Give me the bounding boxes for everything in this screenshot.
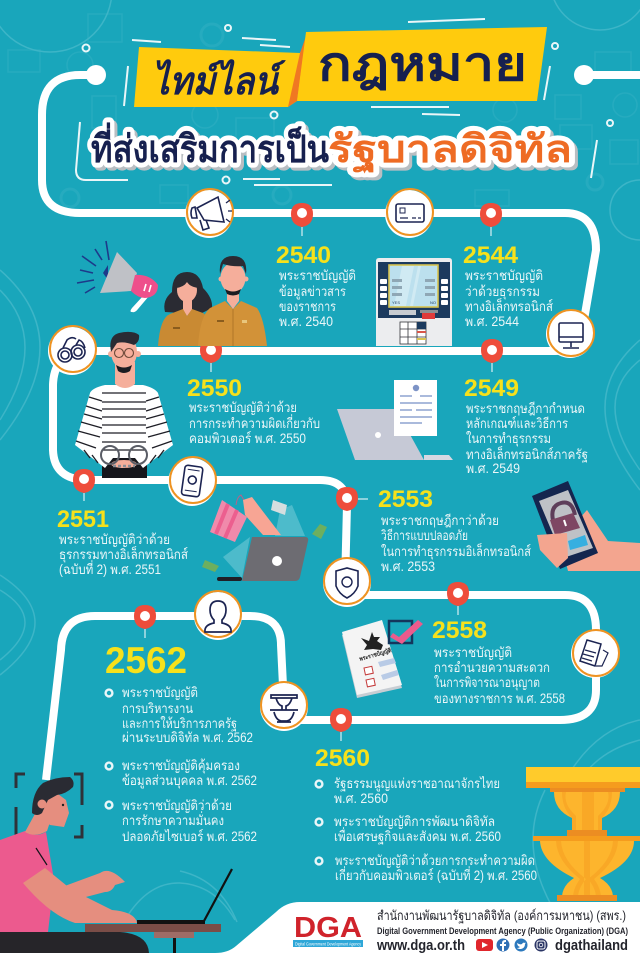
year 2560 block: รัฐธรรมนูญแห่งราชอาณาจักรไทย bbox=[334, 776, 500, 792]
icon: megaphone badge bbox=[185, 189, 233, 238]
year 2544 block bbox=[463, 242, 553, 329]
year 2562 block: และการให้บริการภาครัฐ bbox=[122, 715, 237, 732]
illustration: laptop and document bbox=[337, 380, 453, 460]
year 2553 block: พระราชกฤษฎีกาว่าด้วย bbox=[381, 513, 499, 528]
illustration: megaphone bbox=[77, 241, 158, 312]
illustration: royal decree document bbox=[342, 620, 423, 698]
year 2549 block: พระราชกฤษฎีกากำหนด bbox=[466, 401, 585, 416]
pin 2551 bbox=[73, 469, 95, 501]
year 2540 block: 2540 bbox=[276, 242, 331, 269]
year 2544 block: 2544 bbox=[463, 242, 519, 269]
icon: monitor badge bbox=[546, 310, 594, 358]
title banner: law bbox=[297, 27, 547, 101]
illustration: royal decree document: พระราชบัญญัติ bbox=[358, 646, 392, 663]
year 2551 block: ธุรกรรมทางอิเล็กทรอนิกส์ bbox=[59, 545, 188, 563]
year 2540 block bbox=[276, 242, 356, 329]
icon: phone badge bbox=[168, 457, 216, 506]
year 2562 block: ปลอดภัยไซเบอร์ พ.ศ. 2562 bbox=[122, 828, 257, 844]
illustration: government officers bbox=[158, 256, 267, 346]
pin 2562 bbox=[134, 605, 156, 638]
year 2544 block: พระราชบัญญัติ bbox=[465, 268, 543, 283]
year 2551 block: (ฉบับที่ 2) พ.ศ. 2551 bbox=[59, 560, 161, 577]
year 2562 block: ข้อมูลส่วนบุคคล พ.ศ. 2562 bbox=[122, 773, 257, 789]
footer panel bbox=[0, 902, 640, 959]
icon: shield badge bbox=[323, 558, 371, 607]
footer agency text: dgathailand bbox=[555, 937, 628, 954]
year 2562 block: พระราชบัญญัติ bbox=[122, 685, 198, 700]
year 2551 block bbox=[57, 506, 188, 577]
year 2560 block: พระราชบัญญัติการพัฒนาดิจิทัล bbox=[334, 814, 495, 829]
title subtitle: ที่ส่งเสริมการเป็น bbox=[94, 125, 332, 174]
year 2558 block: ในการพิจารณาอนุญาต bbox=[434, 674, 540, 691]
year 2560 block: พระราชบัญญัติว่าด้วยการกระทำความผิด bbox=[335, 853, 535, 868]
icon: documents badge bbox=[571, 630, 619, 678]
footer agency text bbox=[376, 908, 628, 954]
year 2562 block: พระราชบัญญัติว่าด้วย bbox=[122, 798, 232, 813]
pin 2544 bbox=[480, 203, 502, 236]
year 2560 block: พ.ศ. 2560 bbox=[334, 791, 388, 806]
pin 2558 bbox=[447, 582, 469, 615]
year 2553 block: 2553 bbox=[378, 486, 433, 513]
icon: pedestal badge bbox=[260, 682, 308, 731]
DGA logo: DGA bbox=[294, 912, 362, 944]
title subtitle: รัฐบาลดิจิทัล bbox=[328, 129, 572, 174]
year 2560 block: เกี่ยวกับคอมพิวเตอร์ (ฉบับที่ 2) พ.ศ. 2560 bbox=[335, 866, 537, 883]
footer agency text: www.dga.or.th bbox=[376, 937, 465, 954]
title subtitle bbox=[91, 122, 575, 177]
year 2562 block bbox=[105, 640, 257, 844]
year 2558 block bbox=[432, 617, 565, 706]
year 2549 block: พ.ศ. 2549 bbox=[466, 461, 520, 476]
year 2562 block: 2562 bbox=[105, 640, 187, 681]
year 2550 block: 2550 bbox=[187, 375, 242, 402]
year 2553 block bbox=[378, 486, 531, 574]
year 2540 block: ข้อมูลข่าวสาร bbox=[279, 284, 346, 300]
pin 2550 bbox=[200, 339, 222, 372]
year 2560 block: 2560 bbox=[315, 745, 370, 772]
year 2562 block: ผ่านระบบดิจิทัล พ.ศ. 2562 bbox=[122, 730, 253, 745]
year 2562 block: การรักษาความมั่นคง bbox=[122, 811, 224, 828]
year 2551 block: พระราชบัญญัติว่าด้วย bbox=[59, 532, 170, 547]
year 2550 block: การกระทำความผิดเกี่ยวกับ bbox=[189, 414, 320, 431]
year 2562 block: การบริหารงาน bbox=[122, 701, 193, 716]
year 2553 block: ในการทำธุรกรรมอิเล็กทรอนิกส์ bbox=[381, 542, 531, 560]
title banner: law: กฎหมาย bbox=[318, 37, 527, 90]
title subtitle: ที่ส่งเสริมการเป็น bbox=[91, 122, 329, 171]
illustration: ATM bbox=[376, 258, 452, 346]
year 2560 block: เพื่อเศรษฐกิจและสังคม พ.ศ. 2560 bbox=[334, 827, 501, 845]
year 2549 block: ในการทำธุรกรรม bbox=[466, 430, 551, 447]
year 2544 block: ทางอิเล็กทรอนิกส์ bbox=[465, 297, 553, 314]
year 2549 block: หลักเกณฑ์และวิธีการ bbox=[466, 415, 568, 431]
icon: handcuffs badge bbox=[48, 326, 96, 375]
year 2544 block: ว่าด้วยธุรกรรม bbox=[465, 284, 540, 300]
illustration: arrested man bbox=[75, 332, 173, 478]
year 2553 block: พ.ศ. 2553 bbox=[381, 559, 435, 574]
year 2550 block: พระราชบัญญัติว่าด้วย bbox=[189, 400, 297, 415]
illustration: man at laptop bbox=[0, 774, 232, 953]
title subtitle: ที่ส่งเสริมการเป็น bbox=[91, 122, 329, 171]
year 2558 block: ของทางราชการ พ.ศ. 2558 bbox=[434, 691, 565, 706]
year 2558 block: การอำนวยความสะดวก bbox=[434, 660, 550, 675]
year 2544 block: พ.ศ. 2544 bbox=[465, 314, 519, 329]
title banner: timeline bbox=[134, 36, 306, 107]
pin 2549 bbox=[481, 339, 503, 372]
pin 2540 bbox=[291, 203, 313, 236]
pin 2560 bbox=[330, 708, 352, 741]
illustration: golden pedestal bbox=[526, 767, 640, 901]
year 2549 block: 2549 bbox=[464, 375, 519, 402]
year 2558 block: 2558 bbox=[432, 617, 487, 644]
year 2549 block bbox=[464, 375, 588, 476]
year 2553 block: วิธีการแบบปลอดภัย bbox=[381, 528, 468, 543]
illustration: ATM: NO bbox=[430, 300, 436, 305]
timeline path bbox=[42, 75, 596, 780]
pin 2553 bbox=[336, 487, 368, 511]
year 2550 block: คอมพิวเตอร์ พ.ศ. 2550 bbox=[189, 430, 306, 446]
title banner: timeline: ไทม์ไลน์ bbox=[152, 59, 287, 103]
year 2540 block: พระราชบัญญัติ bbox=[279, 268, 356, 283]
title subtitle: รัฐบาลดิจิทัล bbox=[331, 132, 575, 177]
year 2540 block: พ.ศ. 2540 bbox=[279, 314, 333, 329]
year 2540 block: ของราชการ bbox=[279, 299, 336, 314]
year 2560 block bbox=[315, 745, 537, 883]
start dot left bbox=[86, 65, 106, 85]
year 2550 block bbox=[187, 375, 320, 446]
illustration: ATM: YES bbox=[392, 300, 400, 305]
title subtitle: รัฐบาลดิจิทัล bbox=[328, 129, 572, 174]
icon: person badge bbox=[194, 591, 242, 640]
year 2558 block: พระราชบัญญัติ bbox=[434, 645, 512, 660]
social icons bbox=[476, 938, 548, 952]
illustration: online shopping bbox=[202, 495, 327, 581]
year 2551 block: 2551 bbox=[57, 506, 109, 533]
icon: card badge bbox=[385, 189, 433, 238]
year 2562 block: พระราชบัญญัติคุ้มครอง bbox=[122, 758, 240, 774]
DGA logo: Digital Government Development Agency bbox=[295, 942, 362, 946]
path segment and dot right bbox=[574, 65, 640, 85]
year 2549 block: ทางอิเล็กทรอนิกส์ภาครัฐ bbox=[466, 445, 588, 463]
illustration: locked phone in hand bbox=[532, 481, 640, 571]
